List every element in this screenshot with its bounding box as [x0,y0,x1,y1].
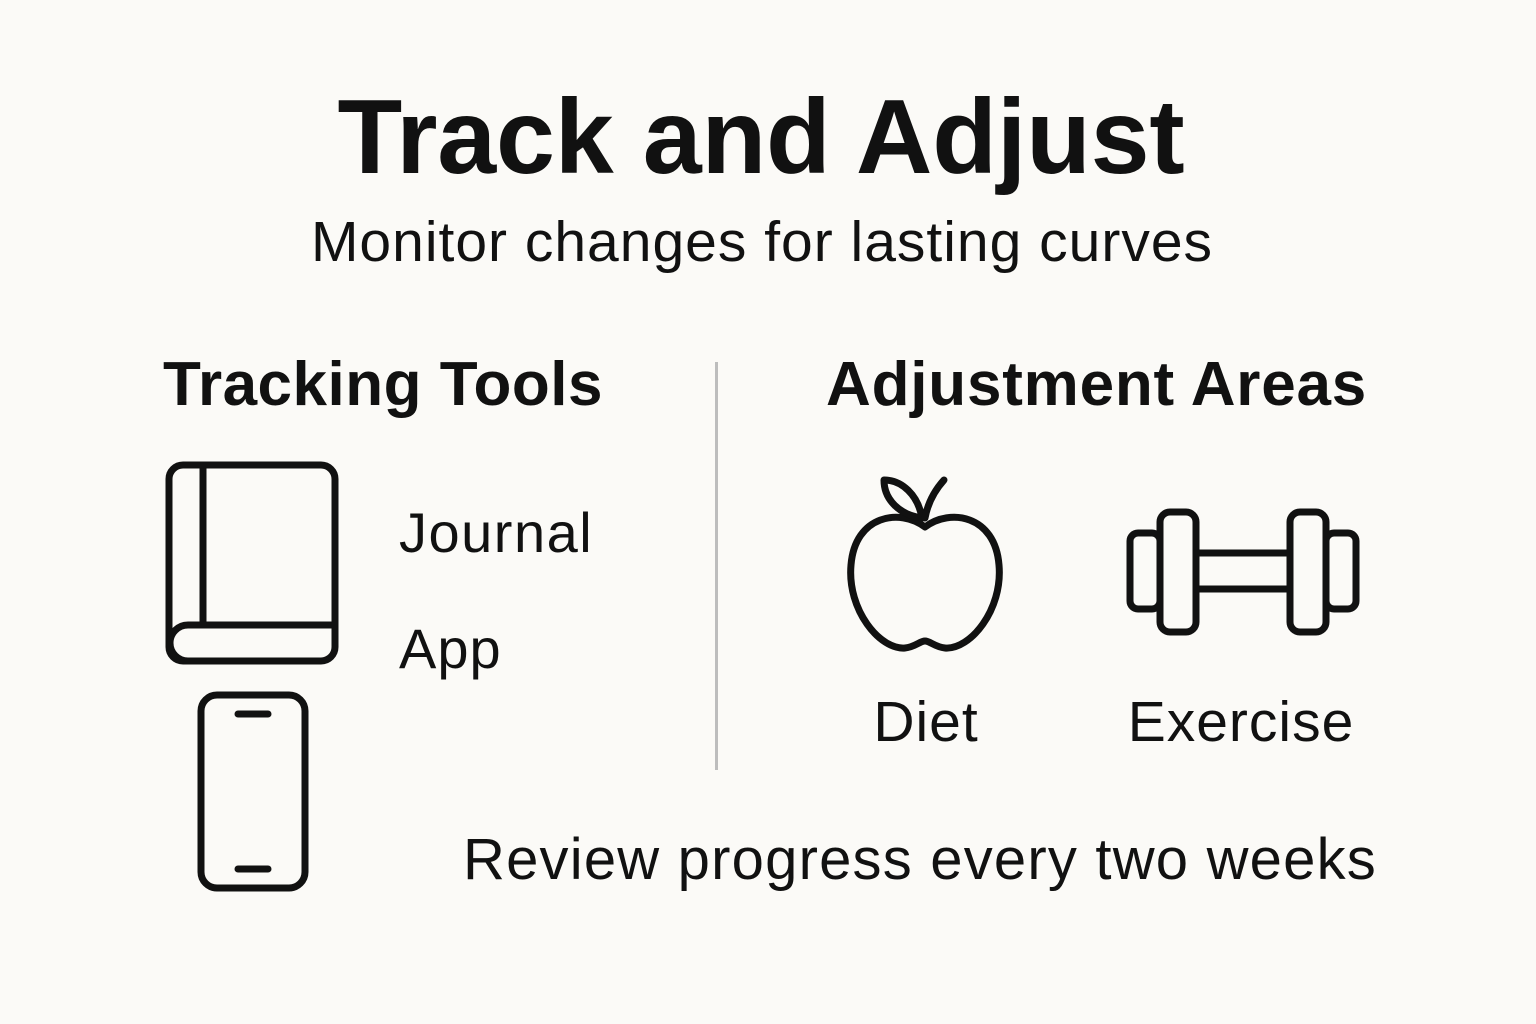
divider [715,362,718,770]
footer text: Review progress every two weeks [463,827,1377,892]
heading: tracking tools: Tracking Tools [163,350,603,419]
label: exercise: Exercise [1128,690,1354,754]
label: journal: Journal [399,501,593,564]
label: diet: Diet [873,690,979,754]
heading: adjustment areas: Adjustment Areas [826,350,1367,419]
subtitle: Monitor changes for lasting curves [311,210,1213,274]
title: Track and Adjust [338,78,1184,196]
label: app: App [399,617,502,680]
